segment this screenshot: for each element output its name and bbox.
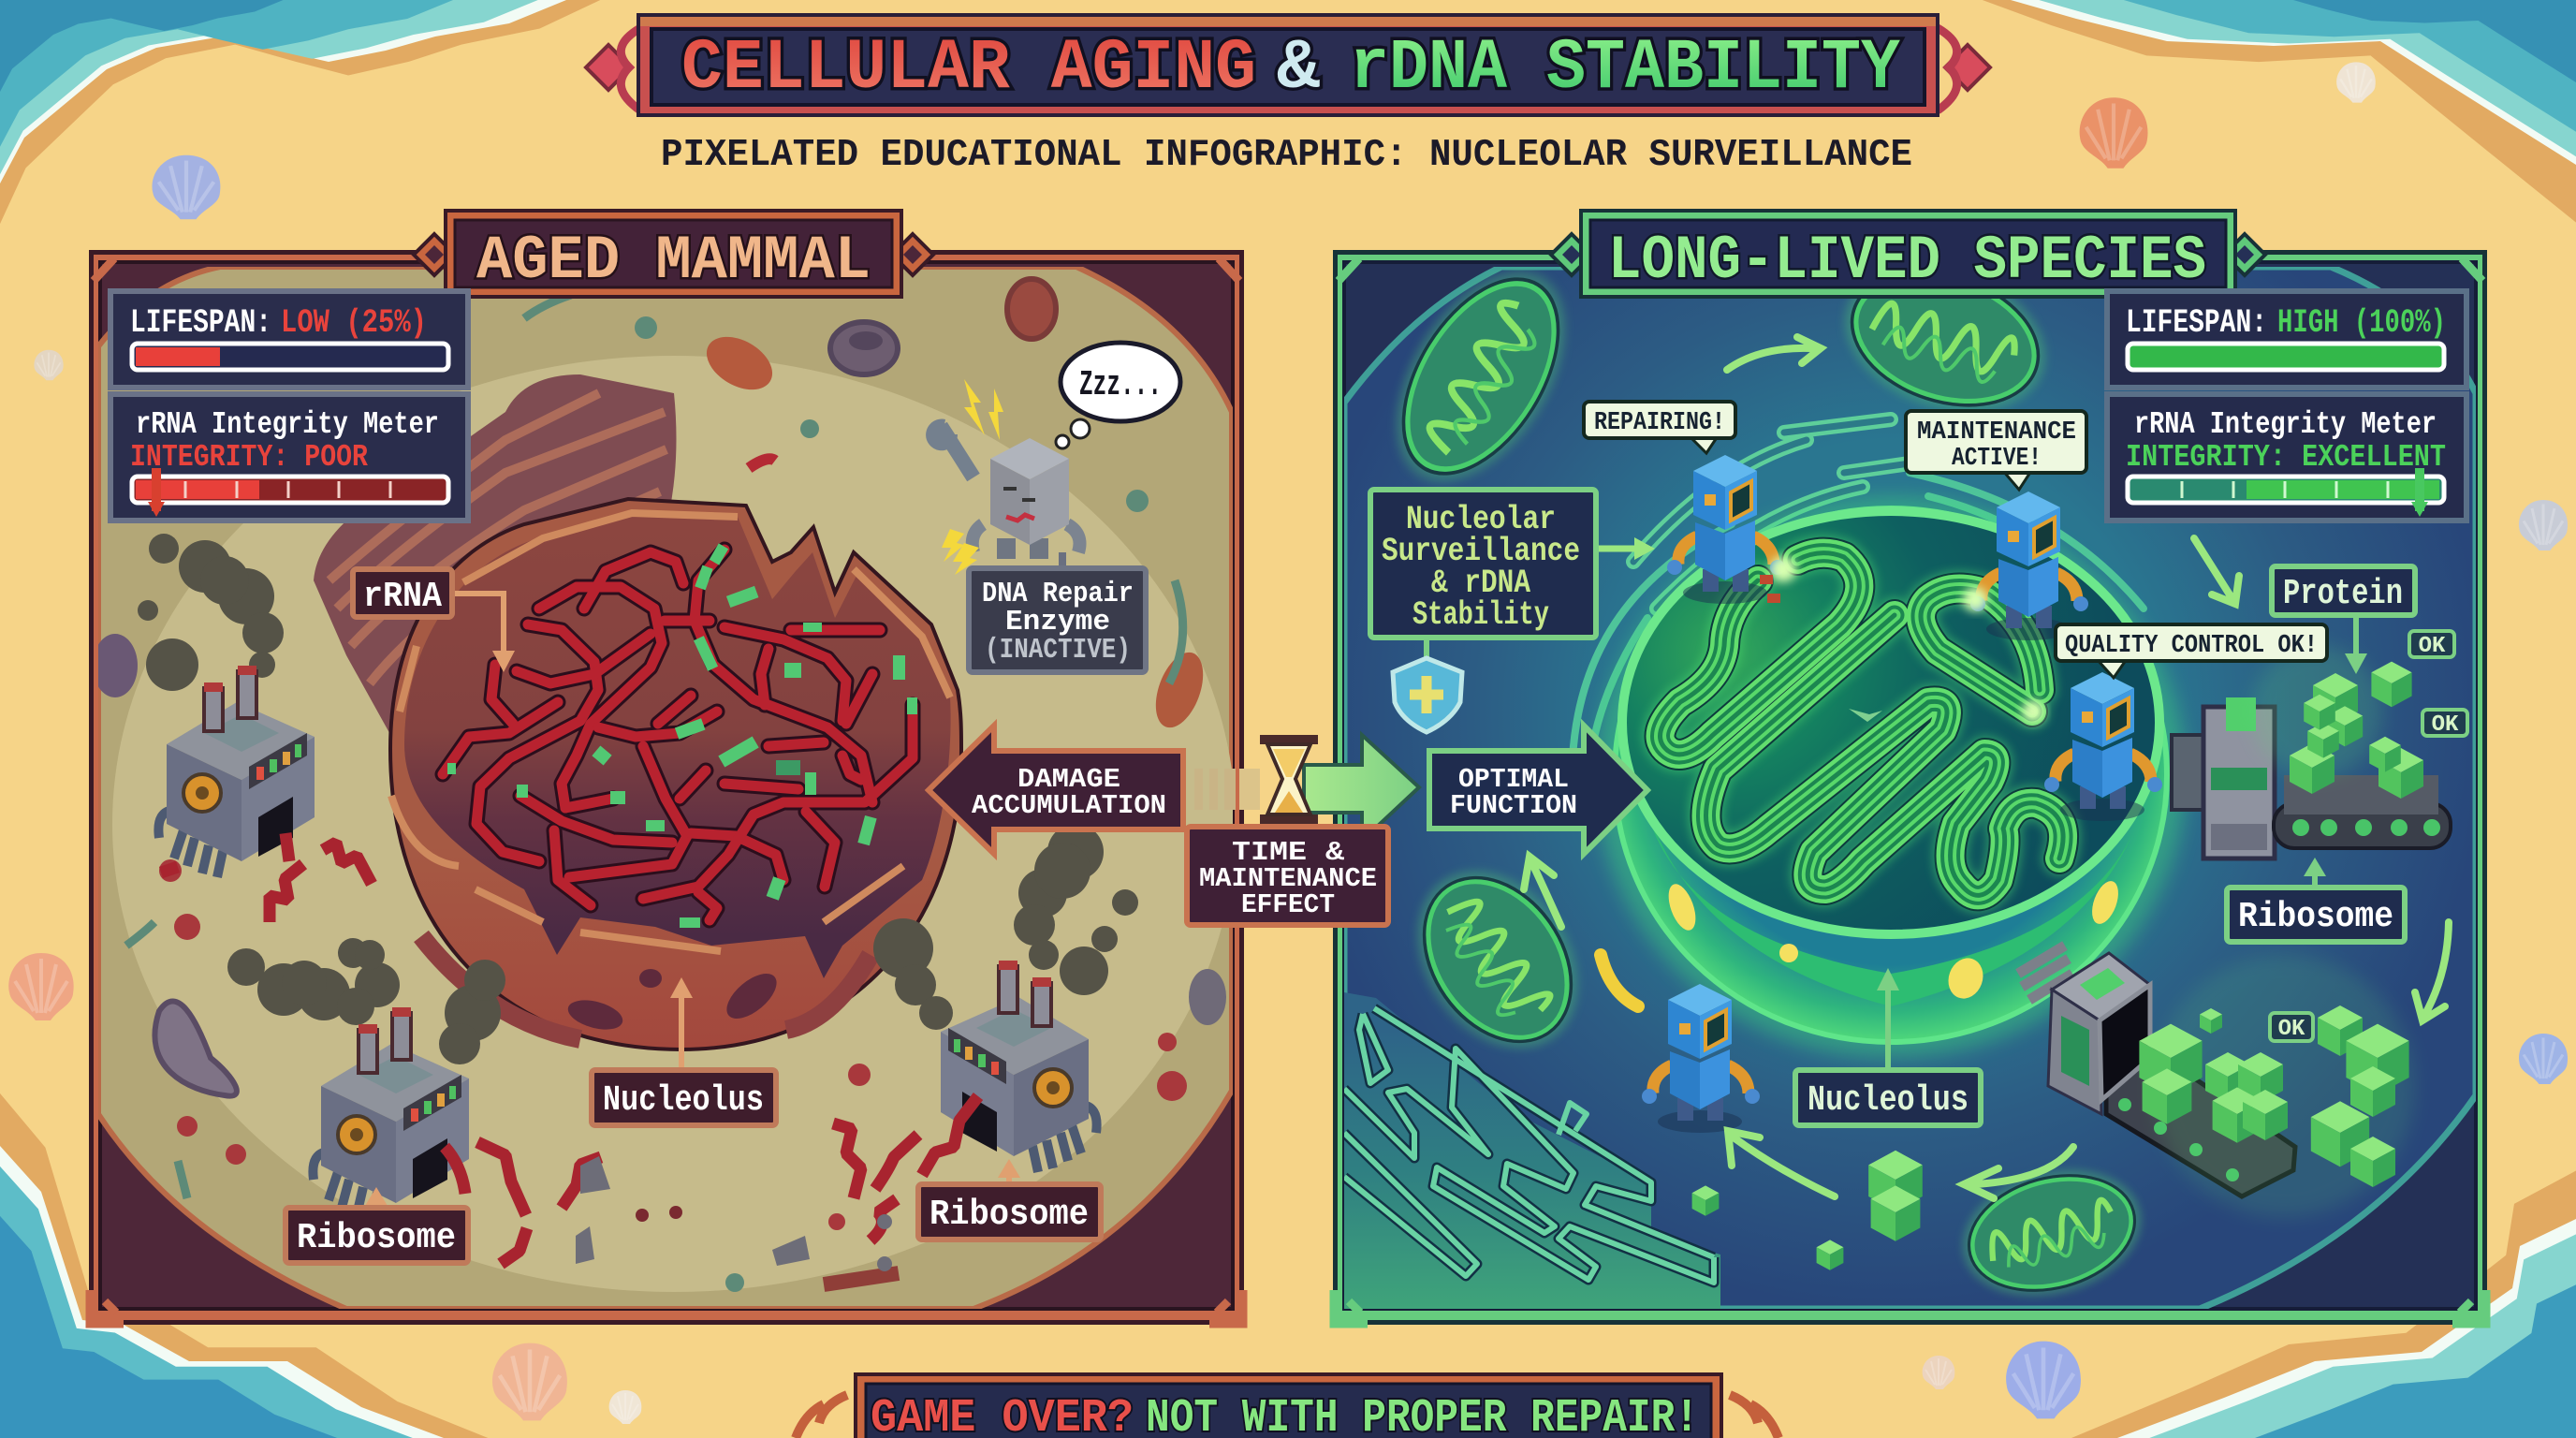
- golgi: [314, 374, 676, 768]
- heading plate: aged mammal: AGED MAMMAL: [476, 226, 871, 296]
- label: nucleolus left: [592, 977, 776, 1125]
- label: ribosome long-lived: [2227, 858, 2405, 942]
- speech bubble: maintenance active: ACTIVE!: [1952, 445, 2042, 473]
- label: protein: Protein: [2283, 574, 2403, 614]
- organelles: [93, 279, 1226, 1292]
- tags: OK: OK: [2432, 712, 2459, 738]
- integrity meter: excellent: rRNA Integrity Meter: [2134, 407, 2437, 442]
- green protein blocks: [1692, 646, 2423, 1270]
- callout: nucleolar surveillance: Stability: [1412, 596, 1549, 634]
- lifespan meter: low: LOW (25%): [281, 304, 427, 342]
- sleep thought bubble: [1056, 343, 1180, 448]
- callout: nucleolar surveillance: & rDNA: [1431, 565, 1530, 602]
- repair robots: [1642, 455, 2162, 1133]
- label: ribosome left: [285, 1187, 468, 1263]
- label: DNA repair enzyme inactive: DNA Repair: [982, 578, 1134, 610]
- label: ribosome left: Ribosome: [297, 1218, 456, 1258]
- label: protein: [2272, 566, 2415, 674]
- label: time and maintenance effect: TIME &: [1232, 837, 1345, 868]
- ocean: top-right corner: [1983, 0, 2576, 223]
- label: nucleolus long-lived: [1795, 968, 1981, 1125]
- title banner: CELLULAR AGING: [681, 28, 1256, 109]
- title banner: [586, 13, 1990, 117]
- decorative stripes into hourglass: [1194, 769, 1260, 810]
- label: DNA repair enzyme inactive: (INACTIVE): [985, 634, 1131, 667]
- arrow: optimal function: FUNCTION: [1450, 790, 1577, 821]
- cytoplasm: [98, 267, 1232, 1309]
- label: ribosome right side of aged panel: Ribosome: [929, 1195, 1089, 1235]
- nucleolus: damaged crater: [390, 499, 961, 1049]
- corner ornaments: [1334, 258, 2486, 1324]
- ocean: bottom-right corner: [2071, 1171, 2576, 1438]
- cell body: [1344, 267, 2476, 1309]
- arrow: damage accumulation: [929, 726, 1183, 854]
- speech bubble: quality control: QUALITY CONTROL OK!: [2065, 632, 2318, 660]
- golgi stacks: [1344, 992, 1720, 1309]
- ribosome factories: [158, 666, 1097, 1219]
- lifespan meter: high: [2107, 291, 2466, 388]
- corner ornaments: [90, 258, 1243, 1324]
- label: nucleolus long-lived: Nucleolus: [1808, 1080, 1969, 1121]
- callout: nucleolar surveillance: Surveillance: [1382, 533, 1580, 570]
- arrow: damage accumulation: DAMAGE: [1017, 764, 1120, 795]
- icon: hourglass: [1260, 735, 1318, 824]
- integrity meter: poor: rRNA Integrity Meter: [136, 407, 439, 442]
- title banner: &: [1277, 28, 1320, 109]
- footer banner: [796, 1372, 1778, 1438]
- integrity meter: poor: [110, 394, 468, 521]
- panel: aged mammal: [89, 250, 1244, 1325]
- nucleus glow: [1596, 496, 2186, 1058]
- electric sparks: [942, 379, 1003, 575]
- speech bubble: maintenance active: MAINTENANCE: [1917, 418, 2076, 447]
- tags: OK: OK: [2419, 634, 2446, 659]
- quality control machine and conveyor: [2018, 946, 2295, 1196]
- ocean: bottom-left corner: [0, 1093, 488, 1438]
- panel: long-lived species: [1333, 242, 2487, 1325]
- lifespan meter: low: LIFESPAN:: [130, 304, 271, 342]
- arrow: optimal function: [1429, 726, 1647, 854]
- endoplasmic reticulum arcs: [1573, 419, 2144, 843]
- smoke clouds: [138, 534, 1138, 1064]
- metal debris: [576, 1156, 892, 1271]
- speech bubble: repairing: [1584, 402, 1735, 453]
- label: ribosome long-lived: Ribosome: [2238, 897, 2393, 937]
- label: time and maintenance effect: [1187, 827, 1388, 925]
- label: DNA repair enzyme inactive: [969, 552, 1146, 672]
- callout: nucleolar surveillance: [1370, 490, 1655, 660]
- lighter inner cytoplasm: [112, 356, 1236, 1292]
- lifespan meter: high: HIGH (100%): [2277, 304, 2446, 342]
- integrity meter: excellent: [2107, 394, 2466, 521]
- label: rRNA with arrow: rRNA: [363, 577, 442, 617]
- label: time and maintenance effect: EFFECT: [1241, 889, 1335, 920]
- tags: OK: [2270, 631, 2467, 1042]
- subtitle: PIXELATED EDUCATIONAL INFOGRAPHIC: NUCLEOLAR SURVEILLANCE: [661, 134, 1912, 177]
- arrow: green forward: [1304, 735, 1419, 841]
- sleep thought bubble: Zzz...: [1079, 365, 1162, 405]
- integrity meter: poor: INTEGRITY: POOR: [130, 440, 368, 475]
- nucleolus glowing shell: [1615, 508, 2167, 1042]
- integrity meter: excellent: INTEGRITY: EXCELLENT: [2126, 440, 2446, 475]
- arrow: optimal function: OPTIMAL: [1458, 764, 1569, 795]
- speech bubble: quality control: [2056, 624, 2327, 678]
- heading plate: long-lived species: LONG-LIVED SPECIES: [1608, 226, 2206, 296]
- label: DNA repair enzyme inactive: Enzyme: [1005, 606, 1110, 638]
- ocean: top-left corner: [0, 0, 600, 224]
- protein synthesis machine: [2172, 697, 2451, 858]
- mitochondria: [1362, 242, 2156, 1315]
- label: ribosome right side of aged panel: [918, 1159, 1101, 1240]
- label: nucleolus left: Nucleolus: [603, 1080, 764, 1121]
- tags: OK: OK: [2278, 1017, 2305, 1042]
- lifespan meter: high: LIFESPAN:: [2126, 304, 2267, 342]
- rDNA strands: [1661, 553, 2063, 895]
- icon: shield: [1393, 658, 1462, 732]
- speech bubble: repairing: REPAIRING!: [1594, 409, 1725, 437]
- tangled rRNA strands: [443, 543, 917, 928]
- flow arrows: [1524, 337, 2449, 1198]
- title banner: rDNA STABILITY: [1350, 28, 1900, 109]
- label: rRNA with arrow: [353, 569, 515, 672]
- repair sparks: [1760, 556, 2044, 723]
- callout: nucleolar surveillance: Nucleolar: [1406, 501, 1556, 538]
- speech bubble: maintenance active: [1906, 411, 2086, 490]
- damaged rRNA fragments: [161, 833, 978, 1264]
- inactive DNA repair robot: [926, 419, 1080, 559]
- label: time and maintenance effect: MAINTENANCE: [1199, 863, 1377, 894]
- lifespan meter: low: [110, 291, 468, 388]
- heading plate: aged mammal: [414, 209, 933, 299]
- arrow: damage accumulation: ACCUMULATION: [972, 790, 1166, 821]
